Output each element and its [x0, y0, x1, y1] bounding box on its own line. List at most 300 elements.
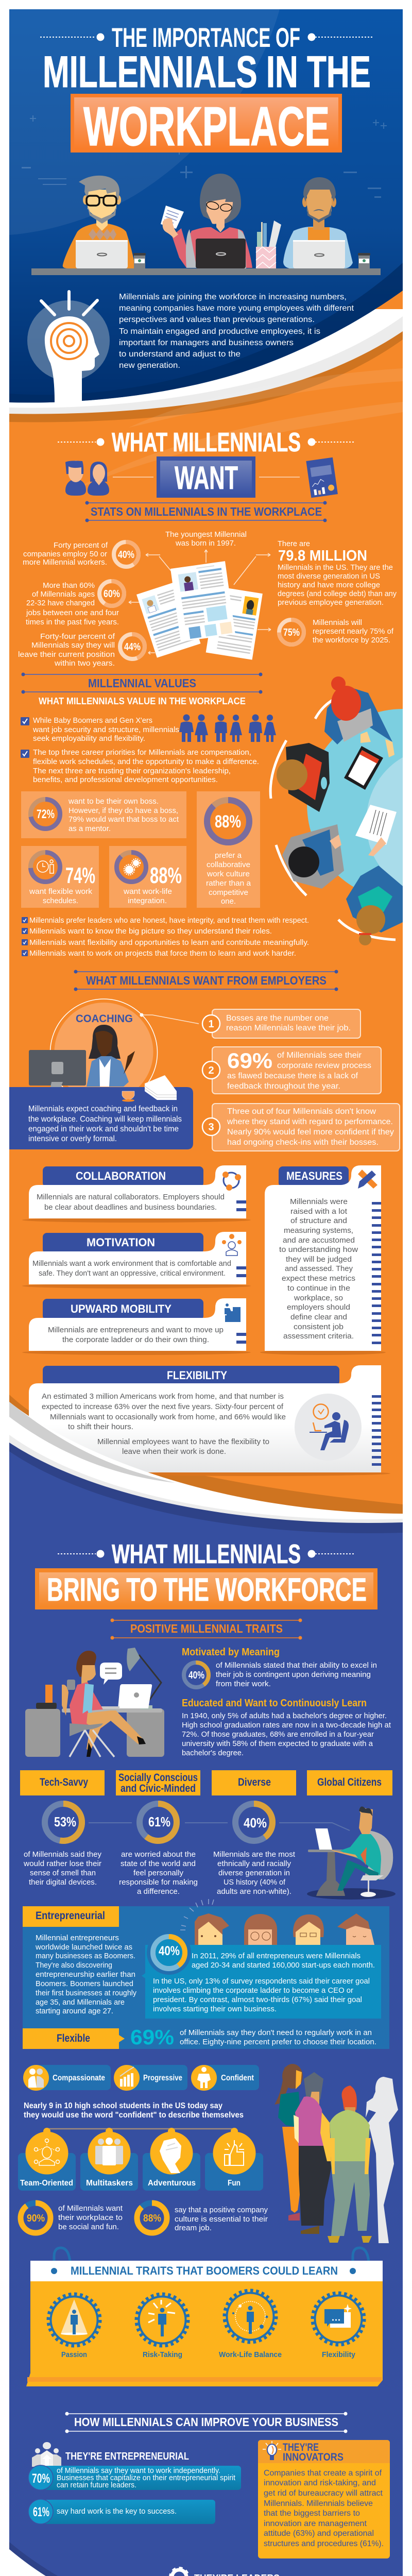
- card: measures: to understanding how: [279, 1245, 358, 1254]
- trait box: socially conscious: [116, 1770, 200, 1795]
- text: digital devices: sense of smell than: [30, 1869, 96, 1877]
- trait card: adventurous: Adventurous: [148, 2179, 196, 2188]
- stat bar: 70 percent independent: Businesses that capitalize on their entrepreneurial spirit: [57, 2473, 236, 2482]
- card: flexibility: Millennial employees want to have the flexibility to: [97, 1437, 269, 1446]
- stat card: 88 percent collaborative: collaborative: [207, 860, 250, 869]
- stat bar: 61 percent hard work: [28, 2499, 215, 2524]
- checklist item: career priorities: [21, 748, 259, 784]
- panel: they're innovators: [258, 2440, 390, 2558]
- subheading: stats on millennials in the workplace: STATS ON MILLENNIALS IN THE WORKPLACE: [91, 505, 322, 518]
- pill: confident: Confident: [221, 2074, 254, 2082]
- inner panel text: In the US, only 13% of survey respondents said their career goal: [153, 1977, 370, 1986]
- stat: 79.8 million: 79.8 MILLION: [278, 548, 367, 564]
- trait card: team-oriented: Team-Oriented: [20, 2179, 73, 2188]
- trait: work-life balance: Work-Life Balance: [219, 2350, 282, 2359]
- trait: educated and want to continuously learn: university with 58% of them expected to graduate with a: [182, 1739, 373, 1748]
- person: top with red hair: [315, 676, 394, 757]
- card: collaboration: Millennials are natural collaborators. Employers should: [37, 1193, 225, 1201]
- card: collaboration: be clear about deadlines and business boundaries.: [44, 1203, 217, 1212]
- subheading: stats on millennials in the workplace: [85, 501, 327, 522]
- checklist item: career priorities: flexible work schedules, and the opportunity to make a difference.: [33, 757, 259, 766]
- trait: educated and want to continuously learn: High school graduation rates are now in a two-decade high at: [182, 1721, 391, 1730]
- donut: 60 percent: 60%: [104, 588, 120, 600]
- trait: educated and want to continuously learn: Educated and Want to Continuously Learn: [182, 1698, 367, 1709]
- stat bar: 61 percent hard work: say hard work is the key to success.: [57, 2507, 177, 2516]
- callout 3: three out of four: Nearly 90% would feel more confident if they: [227, 1128, 394, 1137]
- text: nearly 9 in 10: Nearly 9 in 10 high school students in the US today say: [24, 2102, 222, 2110]
- card: motivation: Millennials want a work environment that is comfortable and: [32, 1259, 231, 1268]
- stat bar: 70 percent independent: can retain future leaders.: [57, 2481, 136, 2489]
- woman in white silhouette: [366, 2077, 398, 2243]
- stat card: 88 percent work-life integration: integration.: [128, 896, 167, 905]
- icon: pencil cup: [256, 221, 281, 268]
- text: state of the world: feel personally: [133, 1869, 183, 1877]
- dark orange band beneath flexibility card: [9, 1395, 403, 1546]
- donut: 75 percent: [279, 620, 304, 645]
- card: measures: of structure and: [290, 1216, 347, 1225]
- stat card: 88 percent collaborative: rather than a: [206, 879, 251, 888]
- inner panel text: aged 20-34 and started 160,000 start-ups each month.: [192, 1961, 375, 1970]
- callout 2: 69 percent: feedback throughout the year.: [227, 1082, 340, 1091]
- text: state of the world: responsible for making: [119, 1878, 198, 1887]
- intro paragraph: to understand and adjust to the: [119, 350, 241, 359]
- stat: 79.8 million: history and have more college: [278, 581, 380, 589]
- resume: left: [136, 580, 201, 658]
- trait: passion: [49, 2295, 99, 2359]
- text: digital devices: would rather lose their: [23, 1859, 101, 1868]
- checklist item: career priorities: The top three career priorities for Millennials are compensation,: [33, 748, 251, 757]
- intro paragraph: [119, 293, 354, 370]
- flexible row: of Millennials say they don't need to regularly work in an: [180, 2028, 372, 2037]
- text: state of the world: state of the world and: [121, 1859, 196, 1868]
- card: measures: raised with a lot: [290, 1207, 348, 1216]
- text: company culture: dream job.: [175, 2224, 212, 2232]
- stat bar: 70 percent independent: of Millennials say they want to work independently.: [57, 2466, 220, 2475]
- icon: entrepreneurial people: [32, 2442, 61, 2467]
- callout 3: three out of four: 3: [208, 1122, 214, 1133]
- resume: centre: [170, 561, 235, 642]
- stat card: 74 percent flexible schedules: schedules.: [43, 896, 78, 905]
- text: digital devices: [23, 1850, 101, 1887]
- text: state of the world: [119, 1850, 198, 1896]
- subheading: how millennials can improve your business: HOW MILLENNIALS CAN IMPROVE YOUR BUSINESS: [74, 2415, 338, 2429]
- subheading: millennial values: MILLENNIAL VALUES: [88, 676, 196, 690]
- stat: youngest millennial: [165, 530, 247, 548]
- text: most diverse generation: diverse generation in: [218, 1869, 290, 1877]
- donut: 53 percent: [45, 1804, 82, 1841]
- text: social and fun: be social and fun.: [58, 2223, 119, 2231]
- section: intro blue header with curved edge: [9, 9, 403, 422]
- stat text: 75 percent of workforce: Millennials will: [313, 618, 362, 627]
- title: the importance of: THE IMPORTANCE OF: [112, 23, 300, 53]
- person: bottom right in blue: [338, 866, 403, 945]
- checklist item: job security: seek employability and flexibility.: [33, 734, 145, 743]
- stat bar: 70 percent independent: 70%: [32, 2471, 50, 2486]
- pill: progressive: Progressive: [143, 2074, 182, 2082]
- card: measures: and assessed. They: [285, 1264, 353, 1273]
- coaching text panel: the workplace. Coaching will keep millennials: [28, 1115, 182, 1124]
- heading: what millennials: WHAT MILLENNIALS: [112, 428, 301, 457]
- trait box: socially conscious: and Civic-Minded: [121, 1783, 196, 1794]
- panel: entrepreneurial: Entrepreneurial: [36, 1910, 105, 1922]
- person: seated woman: [36, 1651, 146, 1757]
- connector lines between donuts: [89, 1823, 350, 1831]
- stat: youngest millennial: was born in 1997.: [175, 539, 236, 548]
- callout 3: three out of four: [202, 1104, 400, 1151]
- intro paragraph: meaning companies have more young employees with different: [119, 304, 354, 313]
- stat text: 75 percent of workforce: [313, 618, 394, 645]
- illustration: man at laptop in chair: [307, 1806, 396, 1900]
- left column text: worldwide launched twice as: [35, 1943, 132, 1952]
- stat: 79.8 million: most diverse generation in US: [278, 572, 380, 581]
- pill: compassionate: [23, 2065, 111, 2091]
- card: measures: they will be judged: [286, 1255, 352, 1264]
- icon: left coffee cup: [133, 253, 146, 268]
- stat: youngest millennial: The youngest Millennial: [165, 530, 247, 539]
- stat card: 88 percent work-life integration: 88%: [150, 863, 182, 888]
- speech bubble: [100, 1663, 122, 1685]
- stat text: forty percent of companies: more Millennial workers.: [23, 558, 107, 567]
- card: flexibility: An estimated 3 million Americans work from home, and that number is: [42, 1392, 284, 1401]
- illustration: coaching woman at desk: [29, 1025, 135, 1097]
- callout 2: 69 percent: [202, 1047, 381, 1094]
- checklist item: career priorities: benefits, and professional development opportunities.: [33, 775, 218, 784]
- icon: collaboration ring: [222, 1172, 241, 1191]
- card: measures: measuring systems,: [284, 1226, 353, 1235]
- stat: 79.8 million: [278, 539, 397, 607]
- stat card: 72 percent own boss: 79% would want that boss to act: [68, 815, 179, 824]
- icon: man and woman busts: [65, 461, 109, 496]
- callout 2: 69 percent: 2: [208, 1065, 214, 1076]
- trait: risk-taking: [137, 2295, 187, 2359]
- subheading: what millennials value: WHAT MILLENNIALS VALUE IN THE WORKPLACE: [39, 696, 246, 706]
- panel: they're innovators: structures and procedures (61%).: [264, 2539, 384, 2548]
- faces group: [195, 1913, 374, 1945]
- card: measures: Millennials were: [290, 1197, 348, 1206]
- card: collaboration: [22, 1165, 251, 1223]
- connector lines beside want: [113, 477, 300, 478]
- trait: work-life balance: [219, 2291, 282, 2359]
- callout 1: bosses: 1: [208, 1019, 214, 1030]
- left column text: [35, 1934, 136, 2015]
- trait card: adventurous: [143, 2128, 200, 2191]
- text: most diverse generation: adults are non-white).: [217, 1887, 291, 1896]
- stat text: forty-four percent: leave their current position: [18, 650, 115, 659]
- stat text: forty-four percent: within two years.: [54, 659, 115, 668]
- text: most diverse generation: [213, 1850, 296, 1896]
- icon: paper: [355, 805, 397, 845]
- pill: progressive: [114, 2065, 187, 2091]
- stat text: forty percent of companies: [23, 541, 108, 567]
- callout 3: three out of four: had ongoing check-ins with their bosses.: [227, 1138, 379, 1147]
- icon: right laptop: [293, 240, 345, 268]
- text: state of the world: a difference.: [137, 1887, 180, 1896]
- icon: black laptop: [196, 239, 246, 268]
- flexible row: [23, 2025, 376, 2049]
- card: measures: to continue in the: [287, 1284, 350, 1293]
- stat text: forty percent of companies: companies employ 50 or: [23, 550, 107, 558]
- card: motivation: MOTIVATION: [87, 1236, 155, 1249]
- card: upward mobility: [22, 1298, 251, 1355]
- flexible row: office. Eighty-nine percent prefer to choose their location.: [180, 2038, 376, 2046]
- card: measures: employers should: [287, 1303, 350, 1312]
- icon: six generation silhouettes: [179, 714, 276, 742]
- donut: 40 percent entrepreneurs: 40%: [159, 1944, 180, 1958]
- intro paragraph: new generation.: [119, 361, 180, 370]
- left column text: They're also discovering: [36, 1961, 112, 1970]
- illustration: resumes: [136, 561, 263, 660]
- panel: they're innovators: Companies that create a spirit of: [264, 2469, 382, 2478]
- checklist: four millennials wants: [22, 916, 309, 958]
- desk: [31, 268, 381, 275]
- stat card: 88 percent collaborative: prefer a: [215, 851, 242, 860]
- left column text: many businesses as Boomers.: [36, 1952, 135, 1960]
- subheading: positive millennial traits: [110, 1619, 302, 1639]
- icon: motivation person: [222, 1234, 242, 1256]
- stat text: 75 percent of workforce: represent nearly 75% of: [313, 627, 394, 636]
- coaching text panel: [9, 1087, 193, 1149]
- trait: motivated by meaning: Motivated by Meaning: [182, 1647, 280, 1658]
- checklist: four millennials wants: Millennials want to work on projects that force them to learn and work harder.: [29, 949, 296, 958]
- trait box: socially conscious: Socially Conscious: [118, 1772, 198, 1784]
- trait card: multitaskers: Multitaskers: [86, 2179, 133, 2188]
- donut: 61 percent: 61%: [148, 1814, 170, 1829]
- stat card: 88 percent collaborative: one.: [221, 897, 236, 906]
- trait box: tech-savvy: [20, 1770, 105, 1795]
- person: right man with moustache: [283, 177, 353, 268]
- card: measures: MEASURES: [286, 1170, 342, 1182]
- stat text: more than 60 percent: jobs between one and four: [26, 608, 119, 617]
- panel: they're innovators: get rid of bureaucracy will attract: [264, 2489, 383, 2498]
- left column text: Millennial entrepreneurs: [36, 1934, 119, 1942]
- icon: ruler and pencil: [358, 1170, 377, 1189]
- donut: 40 percent entrepreneurs: [147, 1930, 191, 1975]
- text: digital devices: their digital devices.: [29, 1878, 97, 1887]
- trait: motivated by meaning: 40%: [188, 1670, 204, 1681]
- trait card: team-oriented: [18, 2128, 76, 2191]
- stat card: 88 percent collaborative: 88%: [215, 812, 241, 832]
- icon: light bulb: [263, 2441, 281, 2460]
- illustration: three workers at a desk: [31, 174, 381, 275]
- card: measures: define clear and: [290, 1313, 347, 1321]
- left column text: starting around age 27.: [36, 2007, 113, 2015]
- checklist: four millennials wants: Millennials want to know the big picture so they understand their roles.: [29, 927, 272, 936]
- intro paragraph: perspectives and values than previous generations.: [119, 315, 315, 324]
- stat card: 74 percent flexible schedules: 74%: [65, 863, 95, 888]
- text: most diverse generation: ethnically and racially: [217, 1859, 291, 1868]
- stat text: more than 60 percent: of Millennials ages: [32, 590, 95, 599]
- trait: educated and want to continuously learn: bachelor's degree.: [182, 1749, 244, 1757]
- left column text: entrepreneurship earlier than: [36, 1970, 135, 1979]
- person: left man in orange sweater: [63, 176, 135, 268]
- card: flexibility: leave when their work is done.: [122, 1447, 226, 1456]
- text: social and fun: their workplace to: [58, 2213, 123, 2222]
- person: left in black: [270, 740, 330, 812]
- stat card: 88 percent work-life integration: [109, 846, 186, 908]
- stat card: 72 percent own boss: want to be their own boss.: [68, 797, 159, 806]
- inner panel text: In 2011, 29% of all entrepreneurs were Millennials: [192, 1952, 360, 1960]
- donut: 40 percent: 40%: [118, 549, 134, 561]
- text: company culture: say that a positive company: [175, 2206, 268, 2214]
- card: measures: workplace, so: [294, 1294, 343, 1302]
- checklist item: job security: want job security and structure, millennials: [32, 725, 179, 734]
- donut: 61 percent: [140, 1804, 177, 1841]
- pill: compassionate: Compassionate: [53, 2074, 105, 2082]
- trait box: tech-savvy: Tech-Savvy: [40, 1776, 88, 1788]
- coaching circle: COACHING: [76, 1013, 133, 1025]
- icon: head with target: [27, 292, 110, 402]
- trait box: diverse: Diverse: [238, 1776, 271, 1788]
- panel: millennial traits that boomers could learn: MILLENNIAL TRAITS THAT BOOMERS COULD LEARN: [71, 2264, 338, 2277]
- man in green shirt: [328, 2086, 372, 2243]
- trait: flexibility: [313, 2294, 364, 2359]
- panel: they're innovators: Millennials. Millennials believe: [264, 2499, 373, 2508]
- icon: right coffee cup: [358, 253, 370, 268]
- trait card: fun: [205, 2128, 263, 2191]
- text: company culture: [175, 2206, 268, 2232]
- callout 3: three out of four: where they stand with regard to performance.: [227, 1117, 393, 1126]
- stat: 79.8 million: degrees (and college debt) than any: [278, 589, 397, 598]
- stat card: 72 percent own boss: 72%: [37, 807, 55, 821]
- trait card: multitaskers: [80, 2128, 138, 2191]
- panel: they're innovators: innovation and risk-taking, and: [264, 2479, 376, 2487]
- inner panel text: involves starting their own business.: [153, 2005, 277, 2013]
- stat text: forty-four percent: Millennials say they will: [31, 641, 115, 650]
- text: most diverse generation: US history (40% of: [224, 1878, 286, 1887]
- heading banner: want: [157, 456, 255, 498]
- card: upward mobility: UPWARD MOBILITY: [71, 1302, 171, 1315]
- donut: 40 percent diverse: 40%: [244, 1815, 267, 1831]
- card: measures: expect these metrics: [282, 1274, 355, 1283]
- card: flexibility: Millennials want to occasionally work from home, and 66% would like: [50, 1413, 286, 1421]
- stat text: forty-four percent: [18, 632, 115, 668]
- laptop: [101, 1684, 152, 1709]
- stat bar: 70 percent independent: [28, 2465, 241, 2490]
- panel: they're innovators: innovation are management: [264, 2519, 367, 2528]
- resume: right: [206, 586, 263, 660]
- stat text: more than 60 percent: [26, 581, 119, 626]
- section background: orange wants section: [9, 278, 403, 1535]
- trait: motivated by meaning: from their work.: [216, 1680, 271, 1688]
- section background: conclusion orange: [9, 2550, 403, 2576]
- icon: person at laptop with clock: [295, 1394, 362, 1461]
- coaching text panel: engaged in their work and shouldn't be time: [28, 1125, 179, 1133]
- text: social and fun: of Millennials want: [58, 2204, 123, 2213]
- callout 3: three out of four: Three out of four Millennials don't know: [227, 1107, 376, 1116]
- trait: risk-taking: Risk-Taking: [143, 2350, 182, 2359]
- donut: 53 percent: 53%: [54, 1814, 76, 1829]
- trait: educated and want to continuously learn: [182, 1698, 391, 1757]
- panel: they're innovators: THEY'RE: [283, 2442, 319, 2453]
- text: social and fun: [58, 2204, 123, 2231]
- stat: 79.8 million: previous employee generation.: [278, 598, 384, 607]
- stat text: forty-four percent: Forty-four percent of: [40, 632, 115, 641]
- text: company culture: culture is essential to their: [175, 2215, 268, 2224]
- subheading: millennial values: [22, 673, 263, 693]
- panel: entrepreneurial: [23, 1899, 389, 2049]
- trait box: diverse: [212, 1770, 296, 1795]
- callout 2: 69 percent: 69%: [227, 1048, 272, 1073]
- person: bottom left in grey: [276, 824, 386, 895]
- trait: motivated by meaning: of Millennials stated that their ability to excel in: [216, 1661, 377, 1670]
- subheading: how millennials can improve your business: [65, 2412, 347, 2433]
- callout 1: bosses: [202, 1009, 360, 1038]
- intro paragraph: important for managers and business owners: [119, 338, 294, 347]
- stat card: 88 percent work-life integration: want work-life: [123, 887, 172, 896]
- callout 2: 69 percent: of Millennials see their: [277, 1051, 362, 1060]
- swoosh divider: orange to blue: [9, 1402, 403, 1546]
- coaching circle: [50, 999, 199, 1106]
- card: upward mobility: Millennials are entrepreneurs and want to move up: [48, 1326, 224, 1334]
- illustration: woman working at desk: [25, 1648, 164, 1757]
- man in pink shirt: [294, 2072, 332, 2234]
- trait: educated and want to continuously learn: In 1940, only 5% of adults had a bachelor's degree or higher.: [182, 1711, 387, 1720]
- coaching text panel: intensive or overly formal.: [28, 1134, 117, 1143]
- donut: 60 percent: [99, 581, 124, 606]
- illustration: group of four millennials from behind: [274, 2064, 398, 2243]
- icon: leader with gears: [145, 2568, 188, 2576]
- checklist: four millennials wants: Millennials want flexibility and opportunities to learn and contribute meaningfully.: [29, 938, 309, 947]
- woman with ponytail: [274, 2064, 304, 2221]
- stat card: 72 percent own boss: as a mentor.: [68, 824, 111, 833]
- panel: millennial traits that boomers could learn: [26, 2248, 383, 2386]
- text: nearly 9 in 10: [24, 2102, 244, 2120]
- left column text: age 35, and Millennials are: [36, 1998, 125, 2007]
- icons: paper stack and tea cup: [122, 1075, 177, 1101]
- checklist: four millennials wants: Millennials prefer leaders who are honest, have integrity, and treat them with respect.: [29, 916, 309, 925]
- stat bar: 61 percent hard work: 61%: [33, 2505, 49, 2519]
- stat: 79.8 million: Millennials in the US. They are the: [278, 563, 393, 572]
- stat text: more than 60 percent: 22-32 have changed: [26, 599, 95, 607]
- trait box: global citizens: [307, 1770, 392, 1795]
- card: flexibility: FLEXIBILITY: [167, 1369, 227, 1382]
- inner panel text: [153, 1952, 375, 2013]
- left column text: their first businesses at roughly: [36, 1989, 136, 1997]
- stat card: 88 percent collaborative: [197, 791, 260, 908]
- icon: climbing stairs: [225, 1303, 241, 1322]
- stat card: 88 percent collaborative: competitive: [209, 888, 248, 897]
- flexible row: 69%: [130, 2025, 174, 2049]
- trait card: fun: Fun: [228, 2179, 241, 2188]
- person: centre woman in pink: [161, 174, 252, 268]
- stat text: more than 60 percent: More than 60%: [43, 581, 95, 590]
- inner panel text: involves climbing the corporate ladder to become a CEO or: [153, 1986, 353, 1995]
- card: measures: and are accustomed: [283, 1236, 355, 1245]
- donut: 90 percent social: 90%: [27, 2213, 45, 2224]
- card: flexibility: [29, 1365, 390, 1476]
- panel: they're innovators: that the biggest barriers to: [264, 2509, 360, 2518]
- icon: report document: [306, 457, 338, 498]
- intro paragraph: To maintain engaged and productive employees, it is: [119, 327, 320, 336]
- subheading: positive millennial traits: POSITIVE MILLENNIAL TRAITS: [130, 1622, 283, 1635]
- left column text: Boomers. Boomers launched: [36, 1979, 133, 1988]
- trait: flexibility: Flexibility: [322, 2350, 356, 2359]
- card: measures: consistent job: [294, 1323, 344, 1331]
- checklist item: job security: [21, 716, 179, 743]
- connector line over trait cards: [47, 2128, 234, 2129]
- trait box: global citizens: Global Citizens: [317, 1776, 382, 1788]
- inner light panel: [142, 1945, 381, 2019]
- icon: left laptop: [76, 240, 128, 268]
- illustration: meeting table from above: [270, 676, 403, 945]
- donut: 40 percent: [114, 542, 139, 567]
- card: flexibility: expected to increase 63% over the next five years. Sixty-four percent of: [42, 1402, 284, 1411]
- text: most diverse generation: Millennials are the most: [213, 1850, 296, 1859]
- text: digital devices: of Millennials said they: [24, 1850, 101, 1859]
- card: collaboration: COLLABORATION: [76, 1170, 166, 1182]
- text: nearly 9 in 10: they would use the word "confident" to describe themselves: [24, 2111, 244, 2120]
- panel: they're innovators: attitude (63%) and operational: [264, 2529, 374, 2538]
